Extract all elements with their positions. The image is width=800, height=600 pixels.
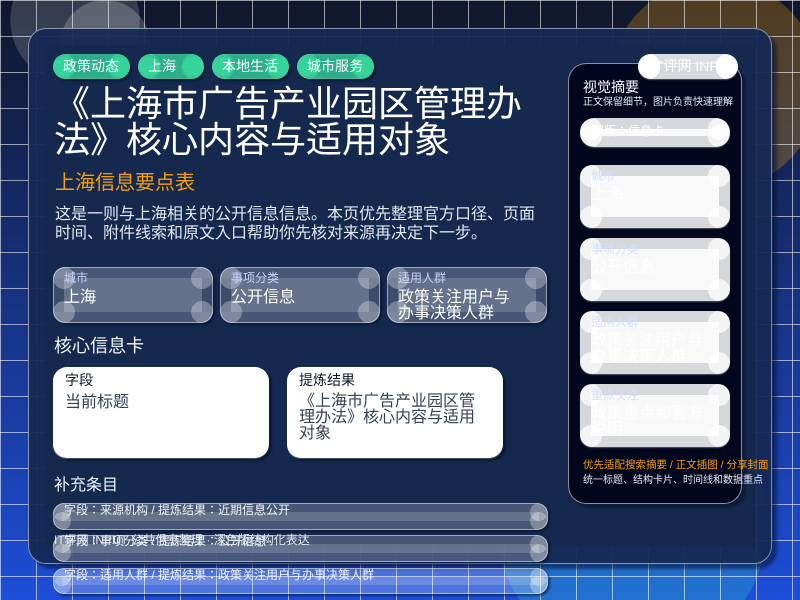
decorative circle: white small [60, 0, 150, 90]
tags row [53, 54, 376, 82]
sidebar card: 重点关注: 说明 [591, 421, 623, 438]
list row: 适用人群: 字段：适用人群 / 提炼结果：政策关注用户与办事决策人群 [64, 568, 374, 582]
list row: 事项分类: 字段：事项分类 / 提炼结果：公开信息 [64, 534, 266, 548]
stat card: 适用人群: 政策关注用户与 [398, 289, 510, 306]
tag: 本地生活: 本地生活 [222, 58, 278, 74]
stat card: 城市: 上海 [64, 289, 96, 306]
sidebar card: 事项分类 [580, 238, 730, 301]
tag: 本地生活 [212, 54, 289, 79]
sidebar card: 适用人群 [580, 311, 730, 374]
stat card: 事项分类 [220, 267, 380, 323]
info card: 字段 [53, 367, 269, 458]
sidebar card: 城市 [580, 165, 730, 228]
footer note: IT评网 INPUT 公共信息整理 · 深色版结构化表达 [54, 533, 310, 547]
panel inner surface [45, 45, 755, 547]
stat card: 事项分类: 公开信息 [231, 289, 295, 306]
sidebar card: 重点关注: 重点关注 [591, 388, 639, 402]
sidebar card: 事项分类: 公开信息 [591, 259, 655, 276]
tag: 上海: 上海 [148, 58, 176, 74]
tag: 上海 [138, 54, 204, 79]
badge: IT评网 INPUT [638, 54, 738, 79]
sidebar note: white: 统一标题、结构卡片、时间线和数据重点 [583, 475, 763, 486]
sidebar card: 适用人群: 适用人群 [591, 315, 639, 329]
decorative circle: teal [496, 389, 768, 600]
sidebar panel [568, 63, 742, 504]
stat card: 适用人群: 办事决策人群 [398, 305, 494, 322]
stat card: 适用人群 [387, 267, 547, 323]
stat card: 事项分类: 事项分类 [231, 271, 279, 285]
info card: 提炼结果 [287, 367, 503, 458]
tag: 城市服务 [297, 54, 374, 79]
stat card: 城市: 城市 [64, 271, 88, 285]
info card: 提炼结果: 提炼结果 [299, 372, 355, 388]
tag: 政策动态: 政策动态 [63, 58, 119, 74]
section heading: 补充条目: 补充条目 [54, 477, 118, 494]
sidebar card: 适用人群: 政策关注用户与 [591, 332, 703, 349]
info card: 字段: 字段 [65, 372, 93, 388]
sidebar pill: 图版: 图版：信息卡 [592, 124, 664, 138]
badge: IT评网 INPUT: IT评网 INPUT [651, 58, 737, 74]
list row: 事项分类 [53, 535, 548, 562]
list row: 来源机构: 字段：来源机构 / 提炼结果：近期信息公开 [64, 503, 290, 517]
section heading: 核心信息卡: 核心信息卡 [54, 336, 144, 356]
sidebar heading: 视觉摘要 [583, 79, 639, 95]
subheading: 上海信息要点表 [55, 172, 195, 194]
decorative circle: orange [609, 0, 800, 191]
list row: 适用人群 [53, 568, 548, 594]
info card: 提炼结果: 《上海市广告产业园区管理办法》核心内容与适用对象 [299, 393, 475, 442]
sidebar card: 事项分类: 事项分类 [591, 242, 639, 256]
sidebar card: 重点关注 [580, 384, 730, 447]
stat card: 适用人群: 适用人群 [398, 271, 446, 285]
stat card: 城市 [53, 267, 213, 323]
sidebar card: 适用人群: 办事决策人群 [591, 348, 687, 365]
sidebar card: 城市: 上海 [591, 186, 623, 203]
tag: 城市服务: 城市服务 [307, 58, 363, 74]
title: 《上海市广告产业园区管理办法》核心内容与适用对象 [54, 83, 522, 160]
sidebar subheading: 正文保留细节，图片负责快速理解 [583, 97, 733, 108]
sidebar note: orange: 优先适配搜索摘要 / 正文插图 / 分享封面 [583, 459, 769, 471]
decorative circle: white large [10, 0, 140, 85]
sidebar card: 重点关注: 政策重点和官方 [591, 405, 703, 422]
sidebar card: 城市: 城市 [591, 169, 615, 183]
info card: 字段: 当前标题 [65, 394, 129, 411]
sidebar pill: 图版 [580, 118, 730, 147]
tag: 政策动态 [53, 54, 130, 79]
list row: 来源机构 [53, 503, 548, 530]
intro paragraph: 这是一则与上海相关的公开信息信息。本页优先整理官方口径、页面时间、附件线索和原文入口帮助你先核对来源再决定下一步。 [55, 206, 535, 242]
